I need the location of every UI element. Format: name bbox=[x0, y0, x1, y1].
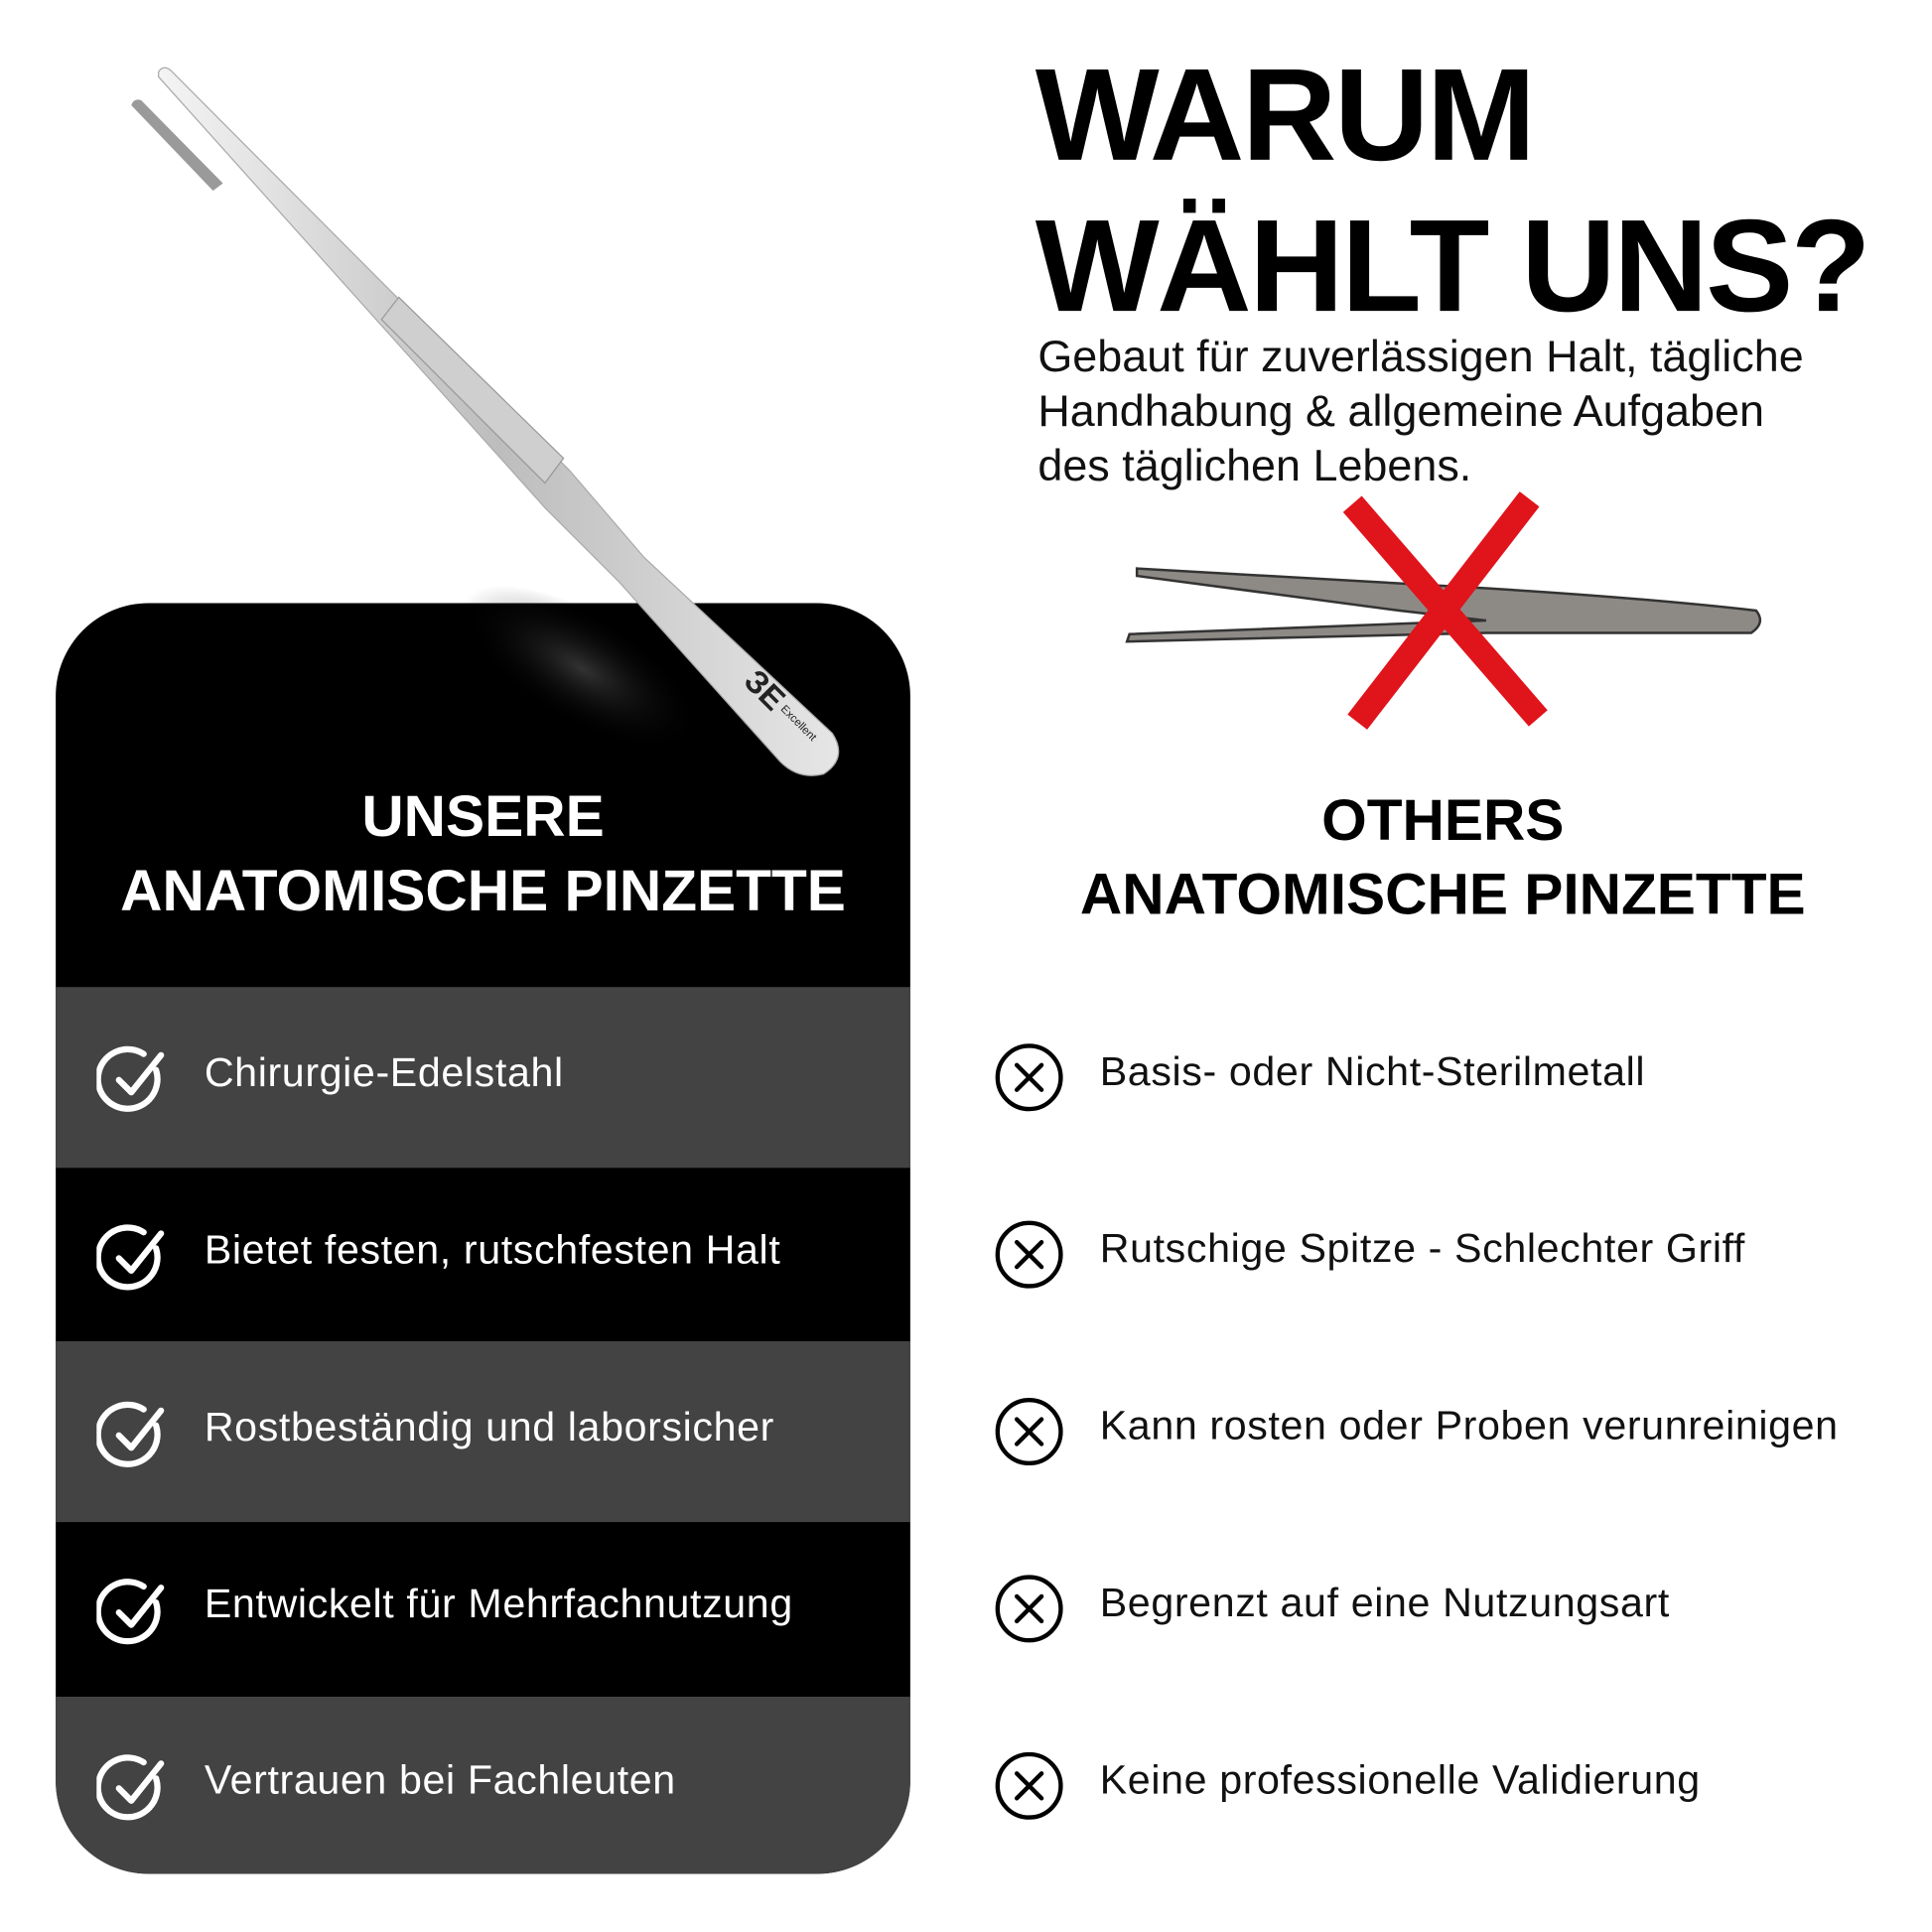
subtitle: Gebaut für zuverlässigen Halt, tägliche bbox=[1037, 331, 1804, 381]
image: our tweezers bbox=[131, 68, 840, 776]
item 5 bbox=[995, 1751, 1701, 1820]
row 1 bbox=[56, 987, 910, 1168]
heading: ours: ANATOMISCHE PINZETTE bbox=[120, 857, 846, 922]
title: WARUM bbox=[1035, 42, 1534, 189]
row 4: Entwickelt für Mehrfachnutzung bbox=[205, 1581, 793, 1626]
row 2: Bietet festen, rutschfesten Halt bbox=[205, 1226, 780, 1272]
row 4 bbox=[96, 1579, 793, 1644]
subtitle: des täglichen Lebens. bbox=[1037, 440, 1471, 490]
item 2: Rutschige Spitze - Schlechter Griff bbox=[1100, 1225, 1745, 1271]
image: others tweezers crossed bbox=[1126, 491, 1761, 730]
item 5: Keine professionelle Validierung bbox=[1100, 1756, 1701, 1802]
item 1 bbox=[995, 1043, 1645, 1112]
row 5: Vertrauen bei Fachleuten bbox=[205, 1756, 676, 1802]
subtitle bbox=[1037, 331, 1804, 490]
heading: ours: UNSERE bbox=[361, 782, 605, 848]
row 1: Chirurgie-Edelstahl bbox=[205, 1049, 564, 1095]
item 3: Kann rosten oder Proben verunreinigen bbox=[1100, 1402, 1839, 1448]
heading: others bbox=[1080, 786, 1806, 926]
row 3 bbox=[56, 1341, 910, 1522]
heading: ours bbox=[120, 782, 846, 922]
item 2 bbox=[995, 1221, 1745, 1289]
item 1: Basis- oder Nicht-Sterilmetall bbox=[1100, 1047, 1645, 1093]
row 5 bbox=[56, 1697, 910, 1873]
image: our tweezers: Excellent bbox=[778, 703, 819, 745]
title bbox=[1035, 42, 1868, 340]
heading: others: ANATOMISCHE PINZETTE bbox=[1080, 861, 1806, 926]
title: WÄHLT UNS? bbox=[1035, 194, 1868, 340]
item 4: Begrenzt auf eine Nutzungsart bbox=[1100, 1579, 1670, 1625]
heading: others: OTHERS bbox=[1321, 786, 1564, 852]
row 3: Rostbeständig und laborsicher bbox=[205, 1403, 774, 1449]
image: our tweezers: ЗE bbox=[738, 662, 792, 718]
row 2 bbox=[96, 1224, 780, 1291]
subtitle: Handhabung & allgemeine Aufgaben bbox=[1037, 385, 1764, 436]
item 4 bbox=[995, 1575, 1670, 1642]
panel: ours bbox=[56, 604, 910, 1873]
item 3 bbox=[995, 1398, 1839, 1465]
